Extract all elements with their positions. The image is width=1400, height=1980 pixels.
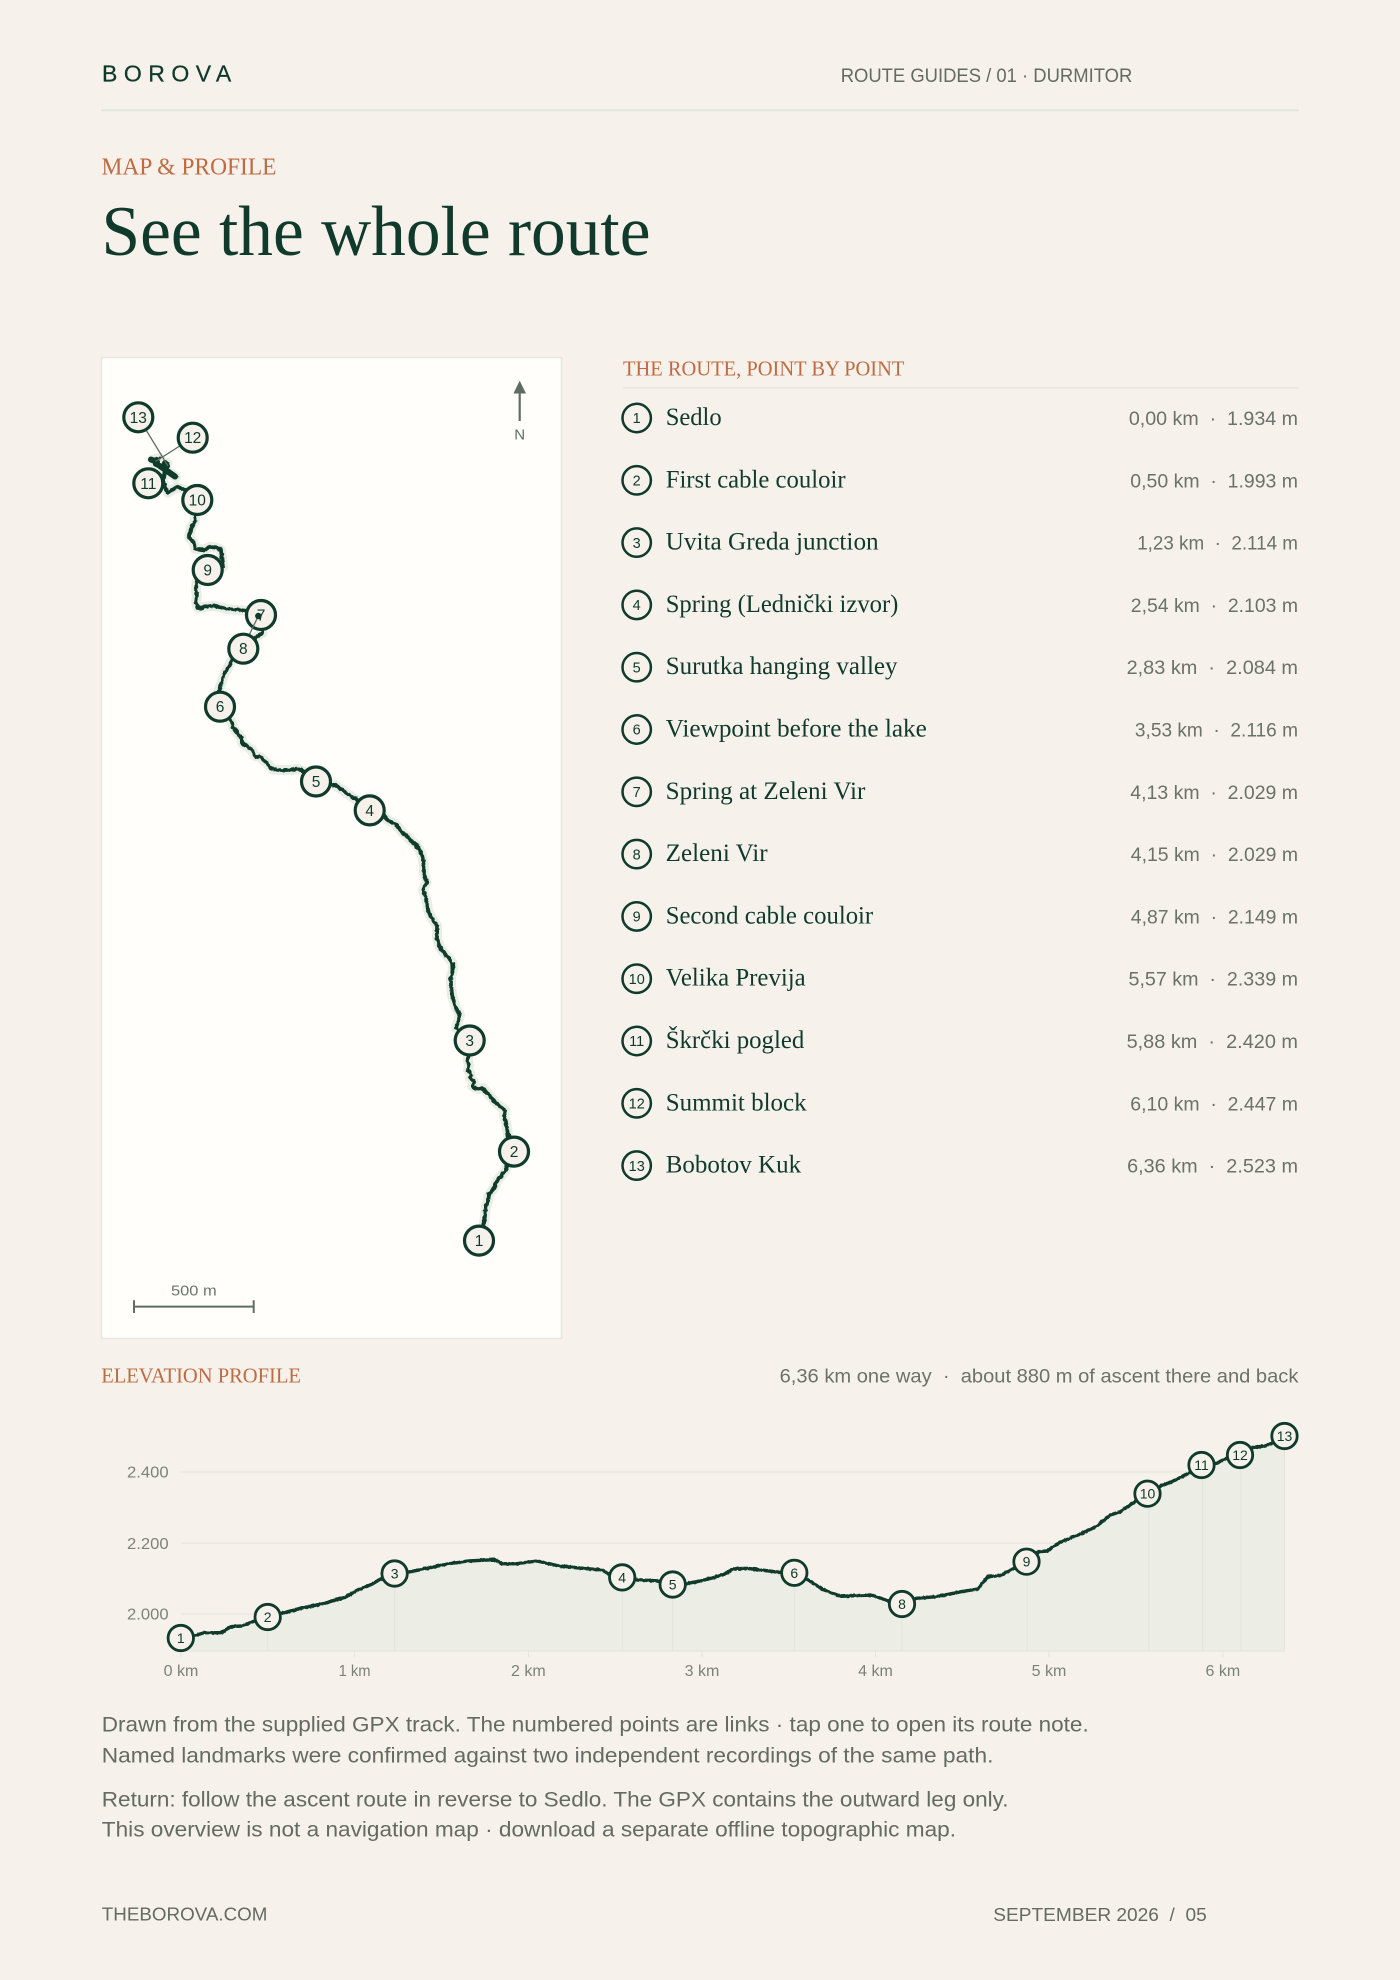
- list row 13: [622, 1151, 1298, 1180]
- list row 6: [622, 715, 1298, 744]
- header breadcrumb: ROUTE GUIDES / 01 · DURMITOR: [841, 65, 1132, 87]
- note: data source: [102, 1714, 1089, 1768]
- panel: route point list: [622, 356, 1299, 1180]
- list row 7: Spring at Zeleni Vir: [666, 778, 866, 805]
- map marker 9: 9: [203, 562, 212, 580]
- list row 5: 5: [633, 660, 641, 676]
- x axis labels: 5 km: [1032, 1663, 1066, 1680]
- route track: [151, 458, 514, 1241]
- map marker 12: [178, 423, 207, 452]
- chart marker 4: [610, 1565, 635, 1590]
- x axis labels: 6 km: [1206, 1663, 1240, 1680]
- list row 1: [622, 404, 1298, 432]
- list row 3: 1,23 km · 2.114 m: [1137, 533, 1298, 555]
- list row 9: 4,87 km · 2.149 m: [1131, 906, 1298, 928]
- note: return and map warning: [102, 1789, 1009, 1842]
- list heading: THE ROUTE, POINT BY POINT: [623, 356, 905, 380]
- y axis labels: 2.000: [127, 1606, 169, 1623]
- chart marker 8: 8: [898, 1596, 906, 1612]
- chart marker 12: 12: [1232, 1447, 1248, 1463]
- title: See the whole route: [102, 193, 650, 271]
- list row 10: 5,57 km · 2.339 m: [1128, 969, 1298, 991]
- map marker 12: 12: [184, 430, 201, 447]
- map marker 5: [302, 767, 330, 796]
- map marker 2: [500, 1137, 528, 1166]
- list row 9: [622, 902, 1298, 931]
- map marker 8: [229, 634, 258, 663]
- map marker 10: 10: [189, 492, 206, 510]
- list row 5: Surutka hanging valley: [666, 653, 898, 680]
- map marker 6: 6: [216, 699, 224, 716]
- note: data source: Named landmarks were confirmed against two independent recordings of the same path.: [102, 1745, 993, 1768]
- chart marker 6: 6: [790, 1565, 798, 1581]
- y axis labels: 2.400: [127, 1464, 169, 1481]
- list row 12: 6,10 km · 2.447 m: [1130, 1093, 1298, 1115]
- list row 8: 8: [633, 847, 641, 863]
- list row 13: 13: [629, 1159, 645, 1175]
- chart marker 2: 2: [264, 1609, 272, 1625]
- list row 11: [622, 1025, 1298, 1055]
- y axis labels: [127, 1464, 169, 1623]
- list row 13: 6,36 km · 2.523 m: [1127, 1156, 1298, 1178]
- scale bar: [134, 1282, 254, 1313]
- map marker 5: 5: [312, 774, 320, 791]
- panel: route map: [102, 358, 562, 1338]
- map marker 13: 13: [130, 410, 147, 427]
- list row 4: 2,54 km · 2.103 m: [1131, 595, 1298, 617]
- list row 7: 4,13 km · 2.029 m: [1130, 782, 1298, 804]
- map marker 8: 8: [239, 641, 248, 658]
- chart marker 6: [782, 1560, 807, 1586]
- list row 10: [622, 964, 1298, 993]
- map marker 7: 7: [257, 608, 265, 624]
- list row 1: 1: [633, 411, 641, 427]
- list row 3: Uvita Greda junction: [666, 529, 879, 556]
- list row 5: [622, 653, 1298, 681]
- list row 6: 6: [633, 723, 641, 739]
- list row 12: [622, 1089, 1298, 1118]
- chart marker 5: 5: [669, 1576, 677, 1592]
- map marker 10: [183, 486, 212, 514]
- list row 3: [622, 528, 1298, 557]
- chart marker 3: 3: [391, 1566, 399, 1582]
- elevation summary: 6,36 km one way · about 880 m of ascent there and back: [780, 1365, 1299, 1387]
- chart marker 2: [255, 1604, 280, 1630]
- list row 12: 12: [629, 1096, 645, 1112]
- list row 11: 11: [629, 1034, 644, 1050]
- north arrow: [513, 381, 526, 443]
- map marker 9: [193, 556, 222, 584]
- list row 12: Summit block: [666, 1089, 807, 1116]
- leader from marker 7: [243, 613, 262, 648]
- note: data source: Drawn from the supplied GPX track. The numbered points are links · tap one to open its route note.: [102, 1714, 1089, 1737]
- x axis labels: [164, 1663, 1240, 1680]
- area under profile: [181, 1436, 1284, 1651]
- list row 1: Sedlo: [666, 404, 722, 431]
- elevation heading: ELEVATION PROFILE: [101, 1363, 301, 1387]
- x axis labels: 3 km: [685, 1663, 719, 1680]
- chart marker 13: [1272, 1423, 1297, 1449]
- y axis labels: 2.200: [127, 1536, 169, 1553]
- chart marker 12: [1227, 1442, 1253, 1468]
- map marker 13: [124, 403, 153, 432]
- list row 11: Škrčki pogled: [666, 1025, 805, 1054]
- list row 9: 9: [633, 910, 641, 926]
- list row 7: [622, 778, 1298, 806]
- section eyebrow: MAP & PROFILE: [102, 153, 276, 180]
- chart marker 3: [382, 1561, 407, 1586]
- list row 1: 0,00 km · 1.934 m: [1129, 408, 1298, 430]
- map marker 11: [134, 469, 163, 498]
- map marker 11: 11: [140, 476, 156, 493]
- chart marker 9: [1014, 1549, 1039, 1574]
- list row 3: 3: [633, 536, 641, 552]
- list row 10: 10: [629, 972, 645, 988]
- chart marker 1: [168, 1625, 194, 1651]
- map marker 6: [206, 692, 234, 721]
- list row 7: 7: [633, 785, 641, 801]
- list row 2: First cable couloir: [666, 466, 846, 493]
- list row 2: 2: [633, 474, 641, 490]
- list row 2: [622, 466, 1298, 494]
- list row 11: 5,88 km · 2.420 m: [1127, 1031, 1298, 1053]
- map marker 4: 4: [365, 803, 374, 820]
- list row 4: 4: [633, 598, 641, 614]
- chart marker 5: [660, 1572, 685, 1597]
- elevation line: [181, 1436, 1284, 1638]
- x axis labels: 2 km: [511, 1663, 546, 1680]
- chart marker 11: [1189, 1452, 1214, 1478]
- footer website: THEBOROVA.COM: [102, 1904, 267, 1924]
- chart marker 10: 10: [1140, 1486, 1155, 1502]
- note: return and map warning: This overview is not a navigation map · download a separate offline topographic map.: [102, 1819, 956, 1842]
- x axis labels: 0 km: [164, 1663, 198, 1680]
- north arrow: N: [514, 426, 525, 443]
- list row 4: Spring (Lednički izvor): [666, 591, 898, 618]
- map marker 1: 1: [475, 1233, 483, 1250]
- x axis labels: 1 km: [339, 1663, 371, 1680]
- chart: elevation profile: [127, 1423, 1297, 1680]
- axis ticks and point droplines: [181, 1436, 1285, 1657]
- chart marker 1: 1: [177, 1630, 185, 1646]
- list row 9: Second cable couloir: [666, 902, 874, 929]
- list row 6: Viewpoint before the lake: [666, 716, 927, 742]
- list row 8: Zeleni Vir: [666, 840, 768, 867]
- x axis labels: 4 km: [858, 1663, 893, 1680]
- map marker 1: [464, 1226, 494, 1255]
- chart marker 9: 9: [1023, 1554, 1031, 1570]
- footer date and page number: SEPTEMBER 2026 / 05: [993, 1904, 1207, 1925]
- list row 8: 4,15 km · 2.029 m: [1131, 844, 1298, 866]
- chart marker 10: [1135, 1481, 1160, 1506]
- list row 2: 0,50 km · 1.993 m: [1130, 470, 1298, 492]
- chart marker 11: 11: [1194, 1457, 1209, 1473]
- scale bar: 500 m: [171, 1282, 217, 1300]
- list row 4: [622, 591, 1298, 619]
- map marker 4: [355, 796, 384, 825]
- map marker 3: [455, 1026, 484, 1055]
- map marker 2: 2: [510, 1144, 518, 1161]
- map marker 3: 3: [465, 1033, 474, 1050]
- chart marker 13: 13: [1277, 1428, 1292, 1444]
- list row 6: 3,53 km · 2.116 m: [1135, 720, 1298, 742]
- list row 8: [622, 840, 1298, 868]
- chart marker 8: [889, 1591, 915, 1617]
- list row 5: 2,83 km · 2.084 m: [1127, 657, 1298, 679]
- chart marker 4: 4: [618, 1569, 626, 1585]
- brand wordmark: BOROVA: [102, 61, 238, 87]
- map marker 7: [246, 600, 276, 630]
- note: return and map warning: Return: follow the ascent route in reverse to Sedlo. The GPX contains the outward leg only.: [102, 1789, 1009, 1812]
- list row 13: Bobotov Kuk: [666, 1152, 802, 1179]
- list row 10: Velika Previja: [666, 965, 806, 992]
